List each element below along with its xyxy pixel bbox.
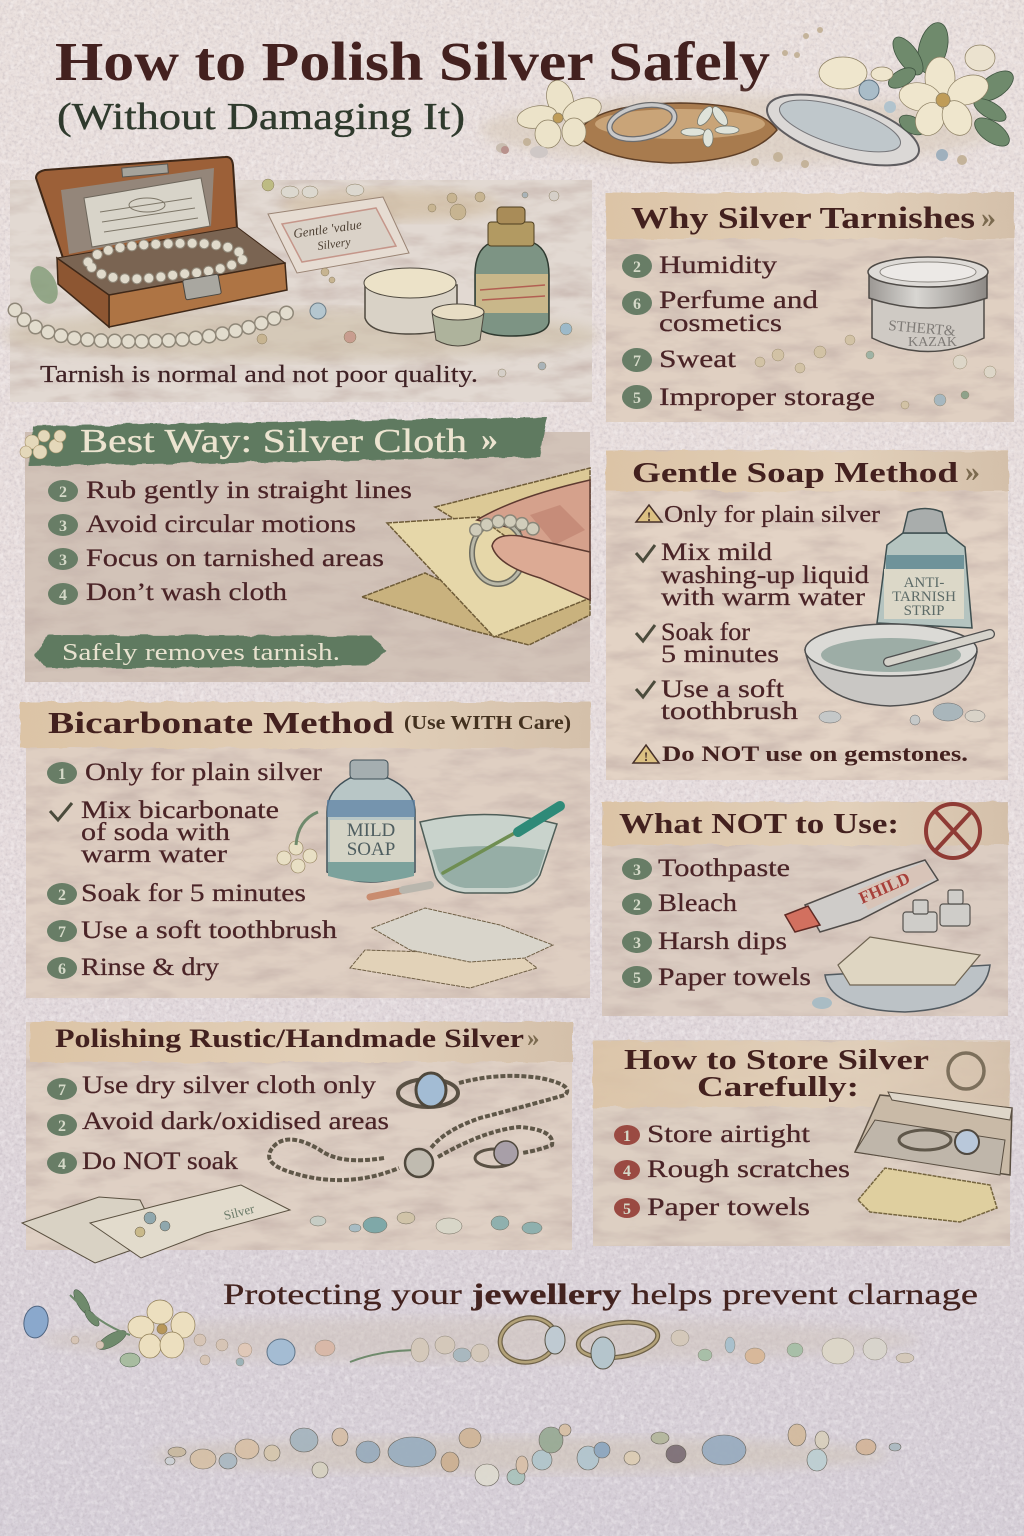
title: How to Polish Silver Safely	[55, 31, 770, 92]
illustration: jar	[868, 257, 988, 352]
heading band: How to Store Silver	[624, 1044, 929, 1076]
list: storage tips: 4	[623, 1163, 631, 1180]
panel: tarnish intro	[0, 157, 600, 402]
list: bicarbonate steps: 1	[58, 766, 66, 783]
list: soap method	[636, 502, 880, 725]
illustration: toothpaste, cubes and dish	[785, 860, 990, 1012]
ribbon: safely removes tarnish: Safely removes tarnish.	[62, 640, 340, 666]
panel: polishing rustic handmade silver	[22, 1022, 572, 1263]
list: steps: Rub gently in straight lines	[86, 477, 412, 504]
heading band	[30, 1022, 572, 1062]
list: bicarbonate steps: 7	[58, 924, 66, 941]
list: things to avoid: Harsh dips	[658, 928, 787, 955]
illustration: open jewellery box with pearls: Silvery	[316, 234, 352, 253]
list: storage tips	[614, 1121, 850, 1221]
illustration: dish, lid and flowers	[480, 19, 1019, 180]
text: tarnish note: Tarnish is normal and not poor quality.	[40, 362, 478, 388]
illustration: open jewellery box with pearls: Gentle 'value	[292, 217, 363, 241]
heading band	[606, 451, 1008, 491]
list: bicarbonate steps: 6	[58, 961, 66, 978]
illustration: rustic ring and chains	[269, 1073, 567, 1180]
heading band: Gentle Soap Method	[632, 457, 958, 489]
banner heading: »	[481, 421, 498, 458]
list: rustic tips: Use dry silver cloth only	[82, 1072, 377, 1099]
illustration: jar: STHERT&	[888, 318, 957, 340]
illustration: anti-tarnish bottle and bowl: STRIP	[904, 603, 944, 619]
illustration: toothpaste, cubes and dish: FHILD	[856, 868, 913, 908]
panel: why silver tarnishes	[606, 193, 1014, 422]
list: steps: 3	[59, 518, 67, 535]
list: steps	[48, 477, 412, 606]
list: rustic tips: Do NOT soak	[82, 1148, 239, 1175]
list: causes	[622, 252, 875, 411]
list: soap method: Mix mild	[661, 539, 773, 566]
banner heading	[20, 417, 548, 466]
heading band: What NOT to Use:	[619, 808, 899, 840]
list: causes: Humidity	[659, 252, 778, 279]
list: rustic tips: 4	[58, 1156, 66, 1173]
list: soap method: 5 minutes	[661, 641, 779, 668]
list: causes: Perfume and	[659, 287, 819, 314]
list: steps: Don’t wash cloth	[86, 579, 288, 606]
list: things to avoid: Bleach	[658, 890, 738, 917]
list: storage tips: Paper towels	[647, 1194, 810, 1221]
list: things to avoid: Paper towels	[658, 964, 811, 991]
list: rustic tips	[47, 1072, 389, 1175]
list: soap method: washing-up liquid	[661, 562, 870, 589]
list: storage tips: Store airtight	[647, 1121, 810, 1148]
list: steps: 3	[59, 552, 67, 569]
illustration: anti-tarnish bottle and bowl	[805, 508, 990, 725]
illustration: pouch, ring and cloth	[855, 1053, 1012, 1222]
list: rustic tips: 7	[58, 1082, 66, 1099]
illustration: open jewellery box with pearls	[15, 157, 572, 377]
subtitle: (Without Damaging It)	[57, 96, 465, 138]
panel: bicarbonate method	[20, 702, 590, 998]
list: bicarbonate steps: of soda with	[81, 819, 231, 846]
illustration: anti-tarnish bottle and bowl: ANTI-	[904, 575, 944, 591]
panel: gentle soap method	[606, 450, 1008, 780]
list: soap method: Only for plain silver	[664, 502, 880, 528]
list: steps: 2	[59, 484, 67, 501]
bottom decoration: row of stones	[150, 1424, 901, 1486]
list: causes: 6	[633, 296, 641, 313]
icon: prohibited cross	[926, 804, 980, 858]
list: soap method: with warm water	[661, 584, 866, 611]
list: bicarbonate steps	[47, 759, 338, 981]
footer message: Protecting your jewellery helps prevent clarnage	[223, 1278, 978, 1311]
list: steps: Avoid circular motions	[86, 511, 356, 538]
heading band	[593, 1041, 1010, 1107]
list: causes: 7	[633, 353, 641, 370]
illustration: soap bottle, glass bowl and cloths	[277, 760, 560, 988]
pebbles	[310, 1212, 542, 1234]
list: causes: cosmetics	[659, 310, 782, 337]
panel: what not to use	[602, 802, 1008, 1016]
list: things to avoid: 3	[633, 862, 641, 879]
list: soap method: toothbrush	[661, 698, 799, 725]
list: soap method: Use a soft	[661, 676, 784, 703]
panel: best way silver cloth	[20, 417, 590, 682]
illustration: jar: KAZAK	[908, 335, 957, 350]
list: steps: Focus on tarnished areas	[86, 545, 384, 572]
heading band	[20, 702, 590, 748]
list: rustic tips: 2	[58, 1118, 66, 1135]
list: bicarbonate steps: warm water	[81, 841, 228, 868]
heading band: Why Silver Tarnishes	[631, 200, 975, 235]
warning: gemstones: !	[644, 749, 648, 764]
illustration: anti-tarnish bottle and bowl: TARNISH	[892, 589, 956, 605]
list: things to avoid: 2	[633, 897, 641, 914]
illustration: open book	[22, 1185, 290, 1263]
list: bicarbonate steps: Mix bicarbonate	[81, 797, 279, 824]
heading band: Polishing Rustic/Handmade Silver	[55, 1024, 524, 1053]
list: soap method: Soak for	[661, 619, 751, 646]
footer decoration: flowers, rings and stones	[21, 1287, 920, 1369]
title block	[55, 31, 770, 138]
list: bicarbonate steps: Soak for 5 minutes	[81, 880, 306, 907]
illustration: open book: Silver	[222, 1201, 257, 1223]
heading band: Carefully:	[697, 1071, 859, 1103]
ribbon: safely removes tarnish	[34, 635, 387, 668]
list: things to avoid	[622, 855, 811, 991]
illustration: hand polishing ring with cloth	[362, 468, 590, 645]
list: soap method: !	[647, 509, 651, 524]
banner heading: Best Way: Silver Cloth	[80, 423, 467, 460]
list: storage tips: 5	[623, 1201, 631, 1218]
heading band: Bicarbonate Method	[48, 705, 394, 740]
list: storage tips: Rough scratches	[647, 1156, 850, 1183]
list: things to avoid: 5	[633, 970, 641, 987]
list: bicarbonate steps: Rinse & dry	[81, 954, 220, 981]
heading band	[602, 802, 1008, 845]
list: bicarbonate steps: Only for plain silver	[85, 759, 323, 786]
list: bicarbonate steps: Use a soft toothbrush	[81, 917, 338, 944]
illustration: soap bottle, glass bowl and cloths: MILD	[347, 820, 395, 841]
heading band: »	[527, 1025, 540, 1052]
panel: how to store silver	[593, 1040, 1012, 1246]
list: things to avoid: 3	[633, 935, 641, 952]
pebbles	[755, 335, 996, 409]
warning: gemstones: Do NOT use on gemstones.	[662, 741, 968, 766]
list: causes: 2	[633, 259, 641, 276]
heading band: »	[965, 455, 980, 488]
list: steps: 4	[59, 587, 67, 604]
heading band: (Use WITH Care)	[404, 712, 571, 734]
list: things to avoid: Toothpaste	[658, 855, 790, 882]
heading band	[606, 193, 1014, 239]
list: bicarbonate steps: 2	[58, 887, 66, 904]
list: causes: Sweat	[659, 346, 736, 373]
list: causes: 5	[633, 390, 641, 407]
list: storage tips: 1	[623, 1128, 631, 1145]
list: rustic tips: Avoid dark/oxidised areas	[82, 1108, 389, 1135]
illustration: soap bottle, glass bowl and cloths: SOAP	[347, 839, 395, 860]
heading band: »	[981, 201, 996, 234]
list: causes: Improper storage	[659, 384, 875, 411]
